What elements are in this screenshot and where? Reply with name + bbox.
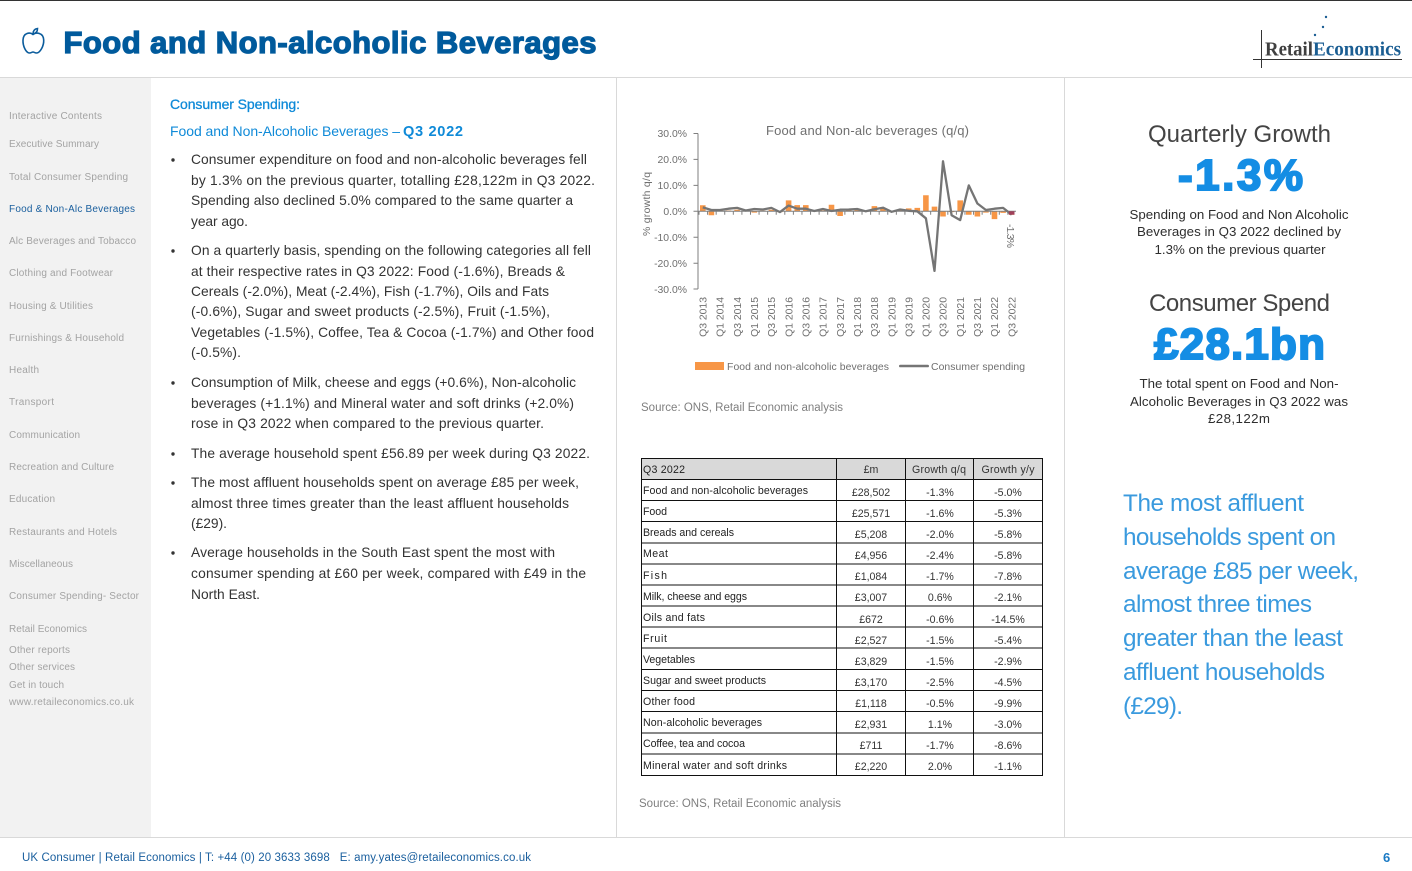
table: Q3 2022 spending by category: -2.0% bbox=[926, 529, 954, 541]
table: Q3 2022 spending by category: Food and non-alcoholic beverages bbox=[643, 485, 808, 497]
panel: sidebar navigation: Furnishings & Household bbox=[9, 333, 124, 344]
title: Food and Non-alcoholic Beverages bbox=[64, 25, 596, 60]
table: Q3 2022 spending by category: Mineral water and soft drinks bbox=[643, 760, 787, 772]
table: Q3 2022 spending by category: -8.6% bbox=[994, 740, 1022, 752]
text block: commentary bullets: The most affluent households spent on average £85 per week, bbox=[191, 475, 579, 490]
panel: sidebar navigation: Food & Non-Alc Beverages bbox=[9, 204, 135, 215]
source note: chart: Source: ONS, Retail Economic analysis bbox=[641, 402, 843, 414]
text block: commentary bullets: Cereals (-2.0%), Meat (-2.4%), Fish (-1.7%), Oils and Fats bbox=[191, 284, 549, 299]
table: Q3 2022 spending by category: -2.4% bbox=[926, 550, 954, 562]
callout: affluent households quote: (£29). bbox=[1123, 693, 1183, 720]
table: Q3 2022 spending by category: -7.8% bbox=[994, 571, 1022, 583]
chart: food and non-alc beverages q/q: 20.0% bbox=[658, 155, 687, 166]
table: Q3 2022 spending by category: 0.6% bbox=[928, 592, 953, 604]
table: Q3 2022 spending by category: Milk, cheese and eggs bbox=[643, 591, 747, 603]
table: Q3 2022 spending by category: -5.4% bbox=[994, 635, 1022, 647]
panel: quarterly growth stat: Beverages in Q3 2022 declined by bbox=[1137, 224, 1341, 239]
chart: food and non-alc beverages q/q: Q3 2015 bbox=[767, 297, 778, 337]
panel: sidebar navigation: Education bbox=[9, 494, 55, 505]
table: Q3 2022 spending by category: Meat bbox=[643, 548, 668, 560]
table: Q3 2022 spending by category: £1,084 bbox=[855, 571, 887, 583]
text block: commentary bullets: at their respective rates in Q3 2022: Food (-1.6%), Breads & bbox=[191, 264, 565, 279]
table: Q3 2022 spending by category: -1.7% bbox=[926, 740, 954, 752]
table: Q3 2022 spending by category: Sugar and sweet products bbox=[643, 675, 766, 687]
panel: consumer spend stat: £28.1bn bbox=[1154, 320, 1325, 369]
chart: food and non-alc beverages q/q: -10.0% bbox=[654, 233, 687, 244]
table: Q3 2022 spending by category: Coffee, tea and cocoa bbox=[643, 738, 745, 750]
panel: sidebar navigation: Miscellaneous bbox=[9, 559, 73, 570]
table: Q3 2022 spending by category: -1.7% bbox=[926, 571, 954, 583]
table: Q3 2022 spending by category: -1.5% bbox=[926, 635, 954, 647]
table: Q3 2022 spending by category: Growth q/q bbox=[912, 464, 966, 476]
table: Q3 2022 spending by category: Vegetables bbox=[643, 654, 695, 666]
table: Q3 2022 spending by category: -0.5% bbox=[926, 698, 954, 710]
heading: consumer spending bbox=[170, 96, 463, 140]
table: Q3 2022 spending by category: £25,571 bbox=[852, 508, 890, 520]
chart: food and non-alc beverages q/q: Q1 2014 bbox=[716, 297, 727, 337]
chart: food and non-alc beverages q/q: 0.0% bbox=[663, 207, 687, 218]
table: Q3 2022 spending by category bbox=[641, 458, 1043, 776]
panel: sidebar navigation: Executive Summary bbox=[9, 139, 99, 150]
table: Q3 2022 spending by category: -1.3% bbox=[926, 487, 954, 499]
table: Q3 2022 spending by category: Fruit bbox=[643, 633, 667, 645]
chart: food and non-alc beverages q/q: Q3 2013 bbox=[698, 297, 710, 337]
panel: sidebar navigation: Other reports bbox=[9, 645, 70, 656]
table: Q3 2022 spending by category: £4,956 bbox=[855, 550, 887, 562]
chart: food and non-alc beverages q/q: Q1 2019 bbox=[887, 297, 898, 337]
chart: food and non-alc beverages q/q: -20.0% bbox=[654, 259, 687, 270]
table: Q3 2022 spending by category: Growth y/y bbox=[982, 464, 1035, 476]
table: Q3 2022 spending by category: Food bbox=[643, 506, 667, 518]
icon: apple bbox=[23, 28, 44, 53]
chart: food and non-alc beverages q/q: Q3 2017 bbox=[836, 297, 847, 337]
panel: sidebar navigation: Restaurants and Hotels bbox=[9, 527, 117, 538]
table: Q3 2022 spending by category: £3,170 bbox=[855, 677, 887, 689]
table: Q3 2022 spending by category: £3,007 bbox=[855, 592, 887, 604]
chart: food and non-alc beverages q/q: Q3 2014 bbox=[733, 297, 744, 337]
callout: affluent households quote: almost three times bbox=[1123, 591, 1312, 618]
table: Q3 2022 spending by category: -2.1% bbox=[994, 592, 1022, 604]
table: Q3 2022 spending by category: £1,118 bbox=[855, 698, 887, 710]
panel: sidebar navigation: Alc Beverages and Tobacco bbox=[9, 236, 136, 247]
table: Q3 2022 spending by category: 1.1% bbox=[928, 719, 953, 731]
chart: food and non-alc beverages q/q: Q3 2018 bbox=[870, 297, 881, 337]
panel: sidebar navigation: Get in touch bbox=[9, 680, 64, 691]
callout: affluent households quote: households spent on bbox=[1123, 524, 1336, 551]
text block: commentary bullets: Spending also declined 5.0% compared to the same quarter a bbox=[191, 193, 573, 208]
callout: affluent households quote: affluent households bbox=[1123, 659, 1325, 686]
footer contact line: UK Consumer | Retail Economics | T: +44 (0) 20 3633 3698 E: amy.yates@retaileconomics.co.uk bbox=[22, 852, 531, 864]
panel: sidebar navigation bbox=[0, 78, 151, 837]
table: Q3 2022 spending by category: Other food bbox=[643, 696, 695, 708]
chart: food and non-alc beverages q/q: Q1 2022 bbox=[990, 297, 1001, 337]
panel: sidebar navigation: Retail Economics bbox=[9, 624, 87, 635]
table: Q3 2022 spending by category: -5.8% bbox=[994, 529, 1022, 541]
table: Q3 2022 spending by category: -3.0% bbox=[994, 719, 1022, 731]
panel: consumer spend stat bbox=[1130, 290, 1348, 426]
table: Q3 2022 spending by category: 2.0% bbox=[928, 761, 953, 773]
text block: commentary bullets: North East. bbox=[191, 587, 260, 602]
source note: table: Source: ONS, Retail Economic analysis bbox=[639, 798, 841, 810]
panel: sidebar navigation: Other services bbox=[9, 662, 75, 673]
callout: affluent households quote bbox=[1123, 490, 1359, 720]
text block: commentary bullets: by 1.3% on the previous quarter, totalling £28,122m in Q3 2022. bbox=[191, 173, 595, 188]
panel: quarterly growth stat bbox=[1130, 121, 1349, 257]
text block: commentary bullets: (-0.6%), Sugar and sweet products (-2.5%), Fruit (-1.5%), bbox=[191, 304, 550, 319]
panel: quarterly growth stat: 1.3% on the previous quarter bbox=[1154, 242, 1326, 257]
table: Q3 2022 spending by category: -0.6% bbox=[926, 614, 954, 626]
panel: sidebar navigation: Health bbox=[9, 365, 39, 376]
chart: food and non-alc beverages q/q: 30.0% bbox=[658, 129, 687, 140]
callout: affluent households quote: greater than the least bbox=[1123, 625, 1343, 652]
panel: sidebar navigation: Total Consumer Spending bbox=[9, 172, 128, 183]
table: Q3 2022 spending by category: £2,527 bbox=[855, 635, 887, 647]
logo: Retail Economics: Economics bbox=[1313, 38, 1401, 60]
table: Q3 2022 spending by category: Fish bbox=[643, 570, 667, 582]
chart: food and non-alc beverages q/q: Q3 2020 bbox=[939, 297, 950, 337]
panel: quarterly growth stat: -1.3% bbox=[1178, 151, 1303, 200]
callout: affluent households quote: The most affluent bbox=[1123, 490, 1304, 517]
table: Q3 2022 spending by category: -5.0% bbox=[994, 487, 1022, 499]
panel: sidebar navigation: www.retaileconomics.co.uk bbox=[8, 697, 135, 708]
chart: food and non-alc beverages q/q: Q1 2018 bbox=[853, 297, 864, 337]
chart: food and non-alc beverages q/q: Q1 2015 bbox=[750, 297, 761, 337]
table: Q3 2022 spending by category: -14.5% bbox=[991, 614, 1025, 626]
table: Q3 2022 spending by category: £28,502 bbox=[852, 487, 890, 499]
chart: food and non-alc beverages q/q: 10.0% bbox=[658, 181, 687, 192]
text block: commentary bullets: rose in Q3 2022 when compared to the previous quarter. bbox=[191, 416, 544, 431]
chart: food and non-alc beverages q/q: Q1 2020 bbox=[922, 297, 933, 337]
panel: quarterly growth stat: Spending on Food and Non Alcoholic bbox=[1130, 207, 1349, 222]
panel: sidebar navigation: Housing & Utilities bbox=[9, 301, 93, 312]
chart: food and non-alc beverages q/q bbox=[642, 123, 1025, 373]
table: Q3 2022 spending by category: £711 bbox=[860, 740, 882, 752]
chart: food and non-alc beverages q/q: Q1 2016 bbox=[784, 297, 795, 337]
table: Q3 2022 spending by category: £3,829 bbox=[855, 656, 887, 668]
table: Q3 2022 spending by category: -1.1% bbox=[994, 761, 1022, 773]
panel: sidebar navigation: Consumer Spending- Sector bbox=[9, 591, 140, 602]
logo: Retail Economics bbox=[1253, 16, 1402, 68]
panel: sidebar navigation: Communication bbox=[9, 430, 80, 441]
text block: commentary bullets: The average household spent £56.89 per week during Q3 2022. bbox=[191, 446, 590, 461]
chart: food and non-alc beverages q/q: Consumer spending bbox=[931, 362, 1025, 373]
panel: consumer spend stat: The total spent on Food and Non- bbox=[1140, 376, 1338, 391]
panel: consumer spend stat: £28,122m bbox=[1208, 411, 1270, 426]
heading: consumer spending: Consumer Spending: bbox=[170, 96, 300, 112]
chart: food and non-alc beverages q/q: Q1 2017 bbox=[819, 297, 830, 337]
table: Q3 2022 spending by category: £5,208 bbox=[855, 529, 887, 541]
text block: commentary bullets: Consumption of Milk, cheese and eggs (+0.6%), Non-alcoholic bbox=[191, 375, 576, 390]
text block: commentary bullets bbox=[171, 152, 595, 602]
text block: commentary bullets: beverages (+1.1%) and Mineral water and soft drinks (+2.0%) bbox=[191, 396, 574, 411]
text block: commentary bullets: almost three times greater than the least affluent households bbox=[191, 496, 569, 511]
chart: food and non-alc beverages q/q: -1.3% bbox=[1004, 224, 1015, 248]
table: Q3 2022 spending by category: -1.6% bbox=[926, 508, 954, 520]
page number: 6 bbox=[1383, 850, 1390, 865]
text block: commentary bullets: consumer spending at £60 per week, compared with £49 in the bbox=[191, 566, 586, 581]
panel: quarterly growth stat: Quarterly Growth bbox=[1148, 121, 1331, 148]
table: Q3 2022 spending by category: -5.8% bbox=[994, 550, 1022, 562]
panel: sidebar navigation: Transport bbox=[9, 397, 54, 408]
text block: commentary bullets: Consumer expenditure on food and non-alcoholic beverages fell bbox=[191, 152, 587, 167]
panel: consumer spend stat: Alcoholic Beverages in Q3 2022 was bbox=[1130, 394, 1348, 409]
chart: food and non-alc beverages q/q: Q3 2022 bbox=[1007, 297, 1018, 337]
panel: sidebar navigation: Recreation and Culture bbox=[9, 462, 114, 473]
chart: food and non-alc beverages q/q: Food and non-alcoholic beverages bbox=[727, 362, 889, 373]
table: Q3 2022 spending by category: -2.5% bbox=[926, 677, 954, 689]
text block: commentary bullets: Average households in the South East spent the most with bbox=[191, 545, 555, 560]
table: Q3 2022 spending by category: Non-alcoholic beverages bbox=[643, 717, 762, 729]
chart: food and non-alc beverages q/q: Food and Non-alc beverages (q/q) bbox=[766, 123, 969, 138]
logo: Retail Economics: Retail bbox=[1265, 38, 1313, 60]
table: Q3 2022 spending by category: -5.3% bbox=[994, 508, 1022, 520]
text block: commentary bullets: (-0.5%). bbox=[191, 345, 241, 360]
text block: commentary bullets: year ago. bbox=[191, 214, 248, 229]
heading: consumer spending: Food and Non-Alcoholic Beverages – bbox=[170, 123, 400, 139]
table: Q3 2022 spending by category: -9.9% bbox=[994, 698, 1022, 710]
chart: food and non-alc beverages q/q: Q3 2021 bbox=[973, 297, 984, 337]
table: Q3 2022 spending by category: -4.5% bbox=[994, 677, 1022, 689]
table: Q3 2022 spending by category: -2.9% bbox=[994, 656, 1022, 668]
callout: affluent households quote: average £85 per week, bbox=[1123, 558, 1359, 585]
chart: food and non-alc beverages q/q: Q3 2019 bbox=[904, 297, 915, 337]
text block: commentary bullets: (£29). bbox=[191, 516, 227, 531]
chart: food and non-alc beverages q/q: % growth q/q bbox=[642, 172, 653, 236]
chart: food and non-alc beverages q/q: Q3 2016 bbox=[802, 297, 812, 337]
table: Q3 2022 spending by category: Oils and fats bbox=[643, 612, 705, 624]
table: Q3 2022 spending by category: £672 bbox=[859, 614, 883, 626]
heading: consumer spending: Q3 2022 bbox=[403, 124, 463, 140]
table: Q3 2022 spending by category: £2,931 bbox=[855, 719, 887, 731]
panel: consumer spend stat: Consumer Spend bbox=[1149, 290, 1330, 317]
chart: food and non-alc beverages q/q: -30.0% bbox=[654, 285, 687, 296]
table: Q3 2022 spending by category: Q3 2022 bbox=[643, 464, 685, 476]
table: Q3 2022 spending by category: -1.5% bbox=[926, 656, 954, 668]
table: Q3 2022 spending by category: Breads and cereals bbox=[643, 527, 734, 539]
panel: sidebar navigation: Interactive Contents bbox=[9, 111, 102, 122]
table: Q3 2022 spending by category: £2,220 bbox=[855, 761, 887, 773]
text block: commentary bullets: On a quarterly basis, spending on the following categories all fell bbox=[191, 243, 591, 258]
panel: sidebar navigation: Clothing and Footwear bbox=[9, 268, 114, 279]
table: Q3 2022 spending by category: £m bbox=[864, 464, 879, 476]
text block: commentary bullets: Vegetables (-1.5%), Coffee, Tea & Cocoa (-1.7%) and Other food bbox=[191, 325, 594, 340]
chart: food and non-alc beverages q/q: Q1 2021 bbox=[956, 297, 967, 337]
